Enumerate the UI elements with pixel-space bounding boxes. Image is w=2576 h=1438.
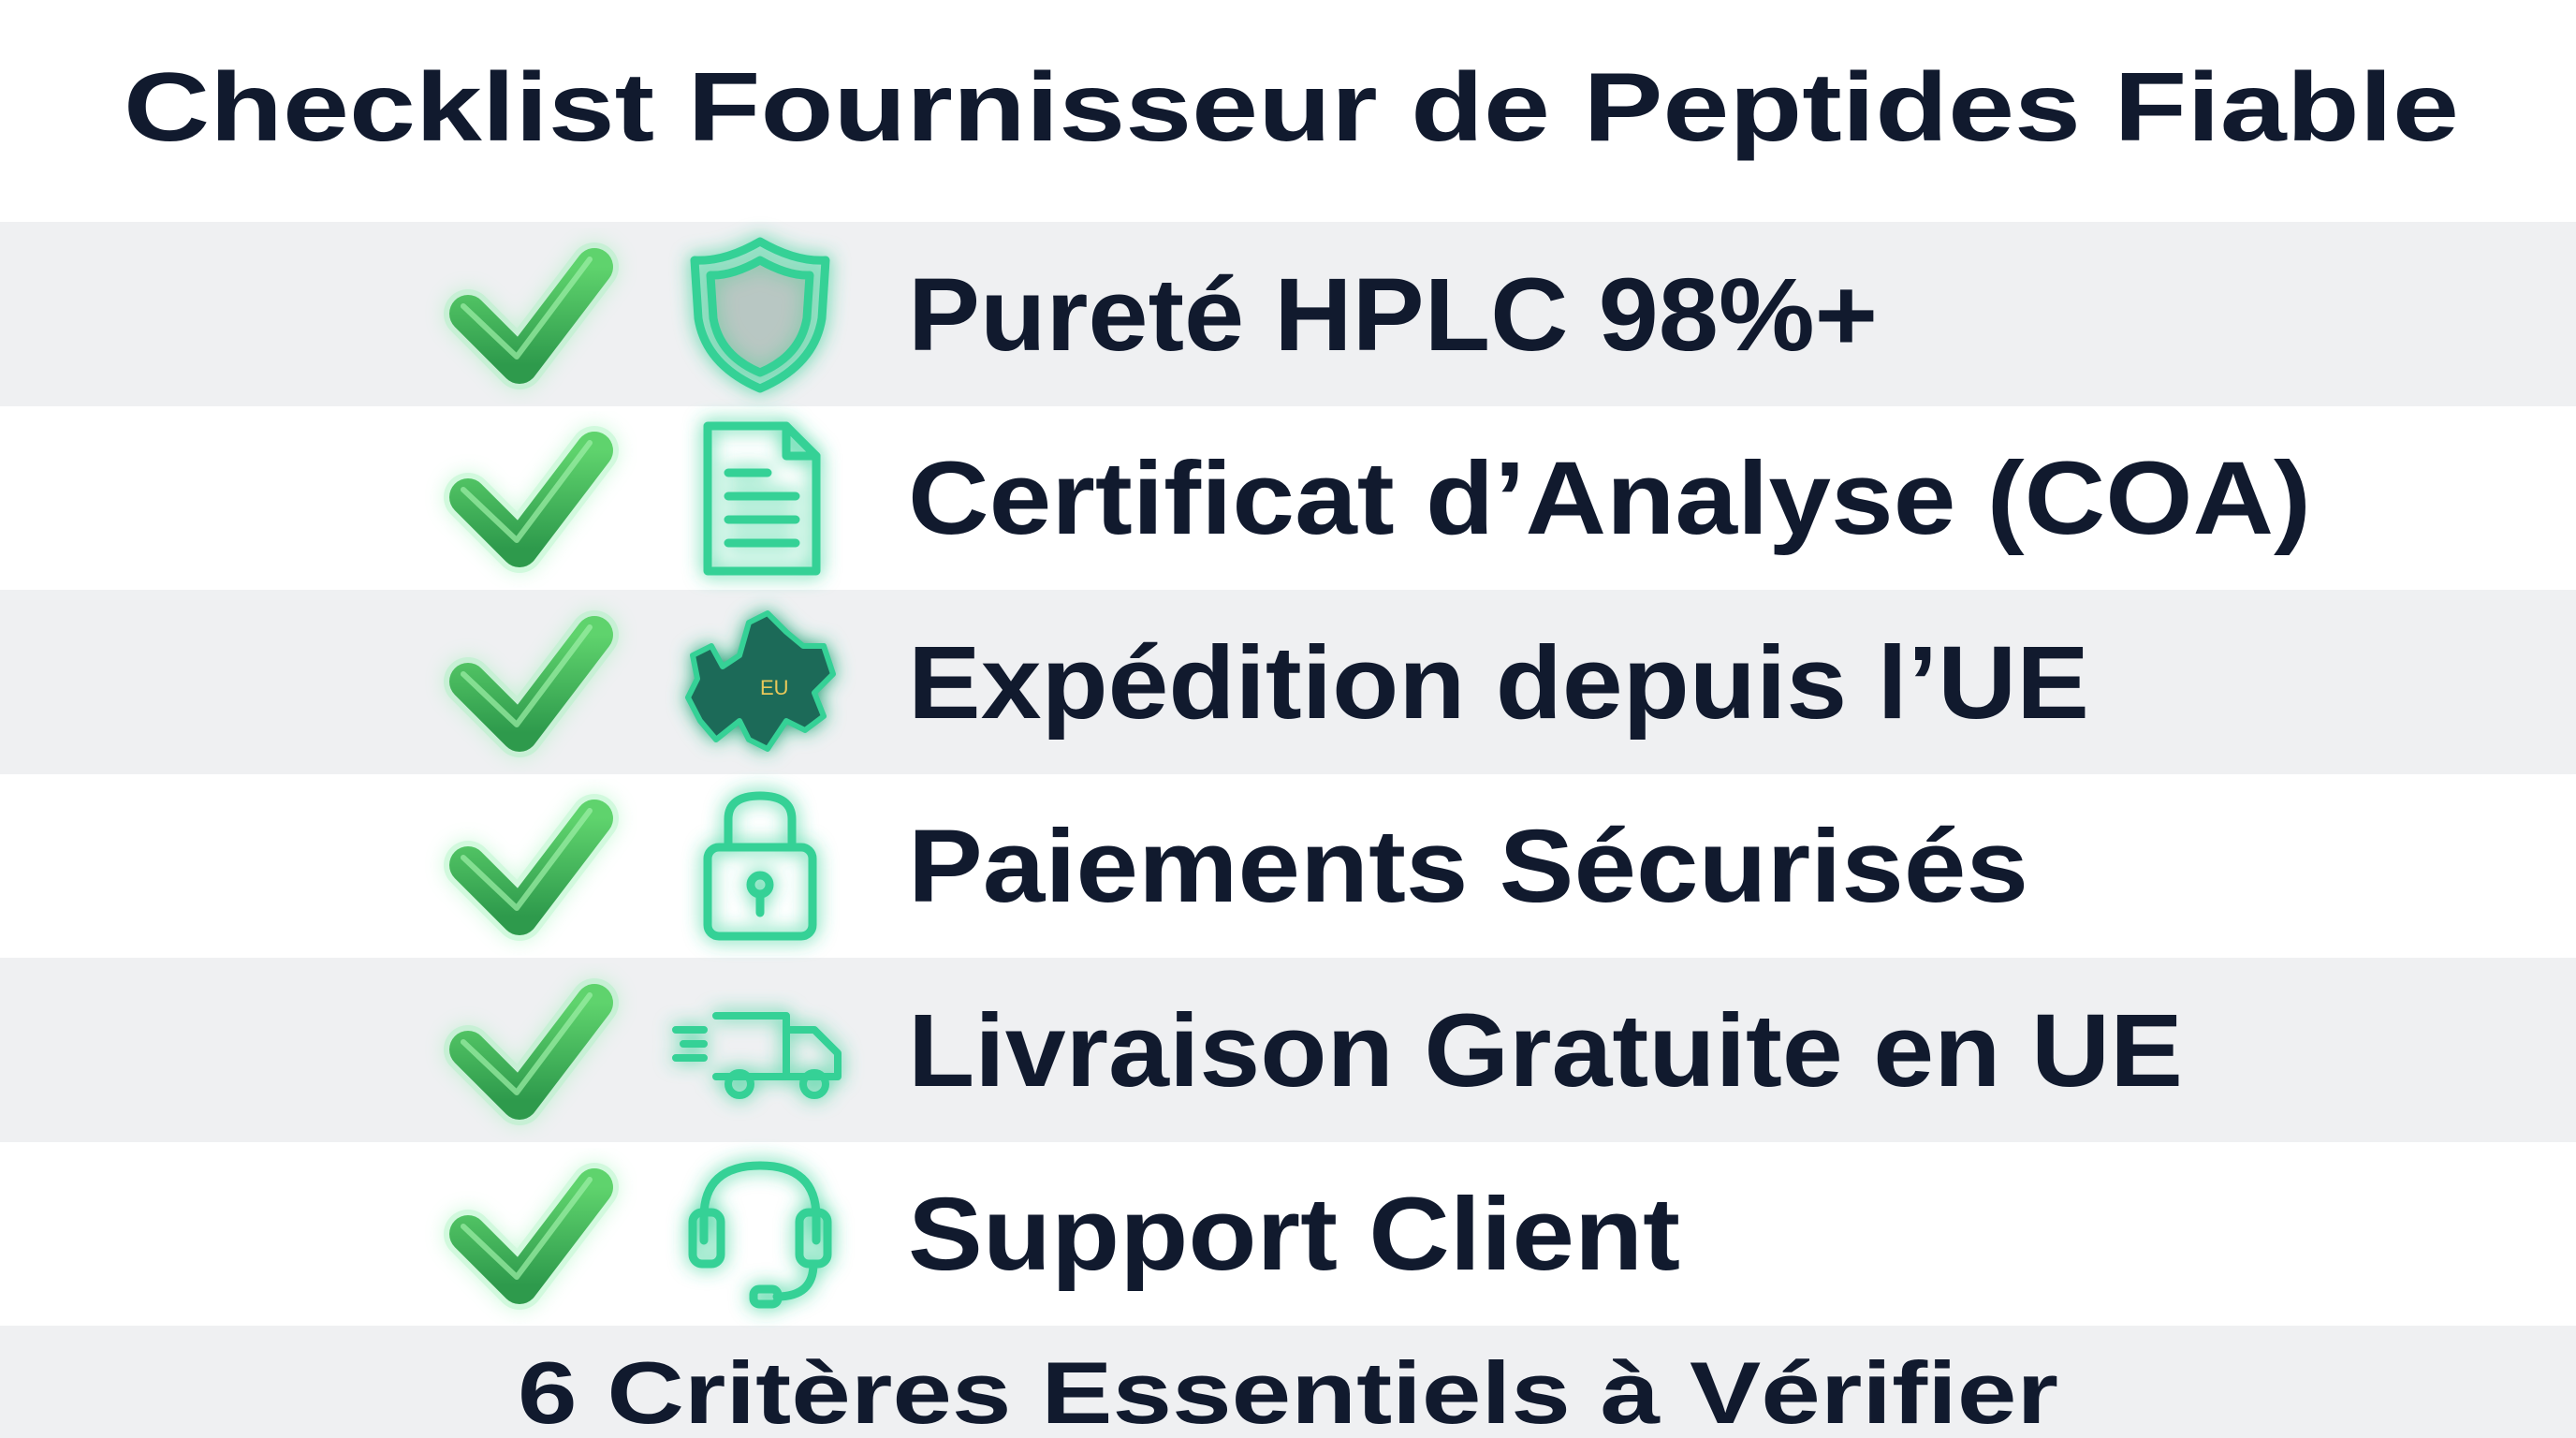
check 1: [463, 259, 594, 365]
check 2: [463, 443, 594, 549]
text 2: Certificat d’Analyse (COA): [908, 441, 2311, 556]
text 6: Support Client: [908, 1177, 1680, 1292]
icon: headset: [693, 1166, 827, 1304]
icon: padlock: [708, 796, 812, 936]
row 2: COA: [463, 426, 2311, 571]
check 5: [463, 995, 594, 1101]
icon: Europe map: EU: [760, 676, 789, 699]
icon: shield: [695, 242, 826, 389]
icon: truck: [676, 1016, 838, 1095]
row 1: purity: [463, 242, 1878, 389]
title: Checklist Fournisseur de Peptides Fiable: [124, 53, 2459, 162]
check 6: [463, 1180, 594, 1285]
row 3: EU shipping: [463, 613, 2089, 749]
icon: Europe map: [688, 613, 833, 749]
text 5: Livraison Gratuite en UE: [908, 993, 2183, 1108]
text 1: Pureté HPLC 98%+: [908, 257, 1878, 373]
icon: document: [708, 426, 816, 571]
row 5: free delivery: [463, 993, 2183, 1108]
row 4: secure payment: [463, 796, 2028, 936]
text 4: Paiements Sécurisés: [908, 809, 2028, 924]
row 6: support: [463, 1166, 1680, 1304]
check 3: [463, 627, 594, 733]
check 4: [463, 811, 594, 917]
text 3: Expédition depuis l’UE: [908, 625, 2089, 741]
